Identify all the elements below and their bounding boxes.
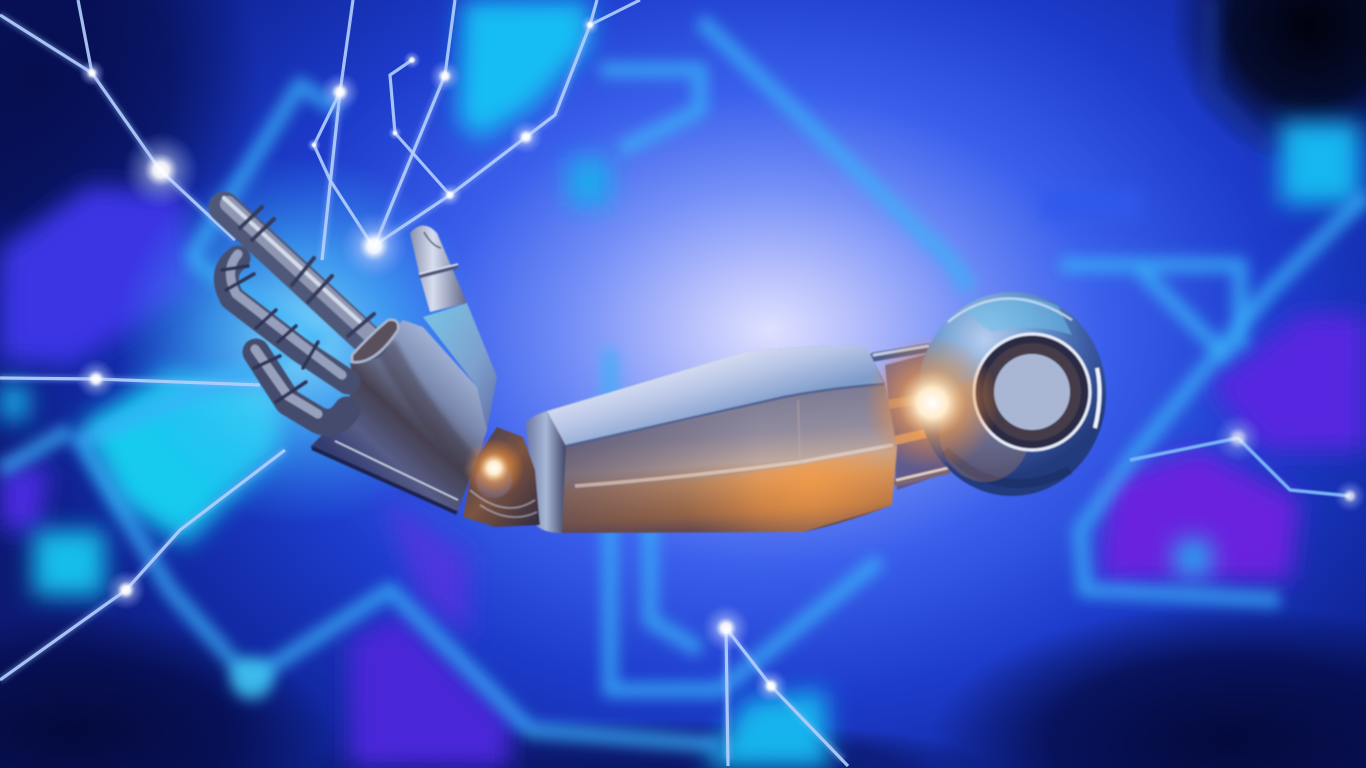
forearm cuff: [526, 411, 566, 533]
wrist glow: [464, 438, 524, 498]
forearm: [526, 346, 897, 533]
thumb: [410, 226, 467, 312]
wrist joint: [463, 427, 540, 527]
palm: [310, 303, 497, 513]
sharp network lines: [0, 0, 848, 766]
index finger base ring: [352, 320, 398, 362]
shoulder connector rods: [874, 346, 955, 490]
shoulder ball joint: [918, 292, 1106, 496]
network lines glow: [0, 15, 843, 760]
robotic arm: [222, 198, 1106, 533]
ring finger: [254, 349, 347, 422]
blurred violet panels: [0, 185, 1366, 768]
middle finger: [222, 254, 348, 382]
cyan haze behind the hand: [115, 155, 485, 525]
orange glow at shoulder: [864, 335, 1000, 471]
index finger: [224, 198, 398, 362]
blurred right network line: [1130, 438, 1350, 496]
